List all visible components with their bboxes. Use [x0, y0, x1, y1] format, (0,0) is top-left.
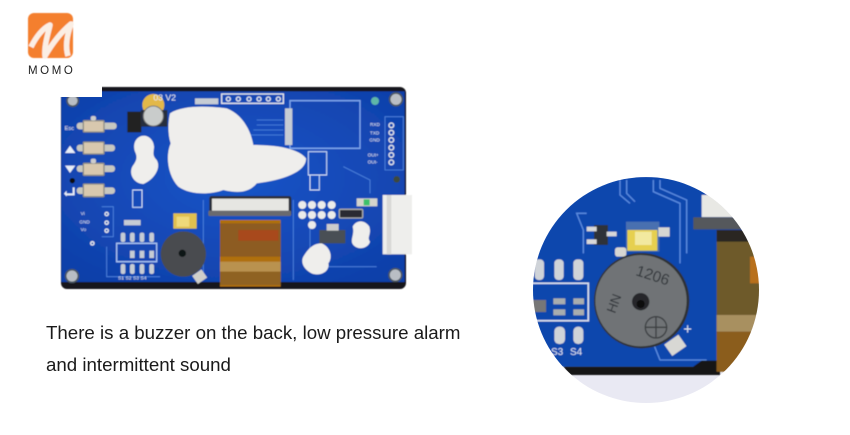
board silkscreen labels: GND — [79, 219, 90, 224]
white silicone blobs — [131, 107, 370, 274]
board silkscreen labels: Vi — [81, 211, 85, 216]
caption line 2: and intermittent sound — [46, 354, 231, 375]
white corner patch — [0, 0, 102, 97]
board silkscreen labels: 03 V2 — [153, 93, 176, 103]
close-up buzzer body — [594, 253, 689, 356]
board silkscreen labels: S1 S2 S3 S4 — [118, 275, 147, 281]
close-up ribbon cable — [693, 195, 760, 372]
panel: buzzer close-up circle — [530, 177, 763, 403]
white connector — [383, 195, 412, 254]
close-up buzzer body: 1206 — [634, 263, 671, 289]
close-up silkscreen: + — [683, 322, 692, 338]
button symbols — [64, 146, 75, 197]
chip and components — [127, 94, 377, 243]
header pads — [91, 94, 394, 245]
board silkscreen labels: Vo — [81, 227, 87, 232]
mounting screws — [66, 93, 402, 282]
board frame — [61, 87, 406, 289]
board silkscreen labels — [65, 93, 380, 281]
close-up PCB — [533, 177, 742, 368]
caption line 1: There is a buzzer on the back, low pressure alarm — [46, 322, 460, 343]
tactile buttons — [77, 116, 117, 197]
board silkscreen labels: OUt- — [368, 160, 378, 165]
close-up transistor — [587, 225, 617, 245]
circle background — [533, 177, 759, 403]
board silkscreen labels: GND — [369, 137, 380, 142]
close-up silkscreen: S4 — [570, 347, 583, 358]
board silkscreen labels: RXD — [370, 122, 380, 127]
panel: circuit board back — [61, 87, 412, 289]
close-up silkscreen — [550, 324, 692, 356]
buzzer — [161, 213, 207, 284]
close-up silkscreen: S3 — [551, 347, 564, 358]
board surface — [61, 91, 412, 287]
logo — [28, 13, 75, 77]
close-up black edge — [563, 361, 720, 375]
board silkscreen labels: Esc — [65, 126, 74, 132]
close-up diode — [615, 222, 670, 257]
board silkscreen labels: OUt+ — [368, 153, 379, 158]
FPC ribbon cable — [208, 197, 291, 287]
close-up switch pads — [533, 259, 584, 344]
solder pad grid — [298, 201, 336, 229]
caption text — [46, 322, 460, 375]
board silkscreen labels: TXD — [370, 130, 380, 135]
close-up buzzer body: HN — [604, 292, 624, 315]
logo mark — [28, 13, 73, 58]
logo wordmark: MOMO — [28, 65, 75, 77]
